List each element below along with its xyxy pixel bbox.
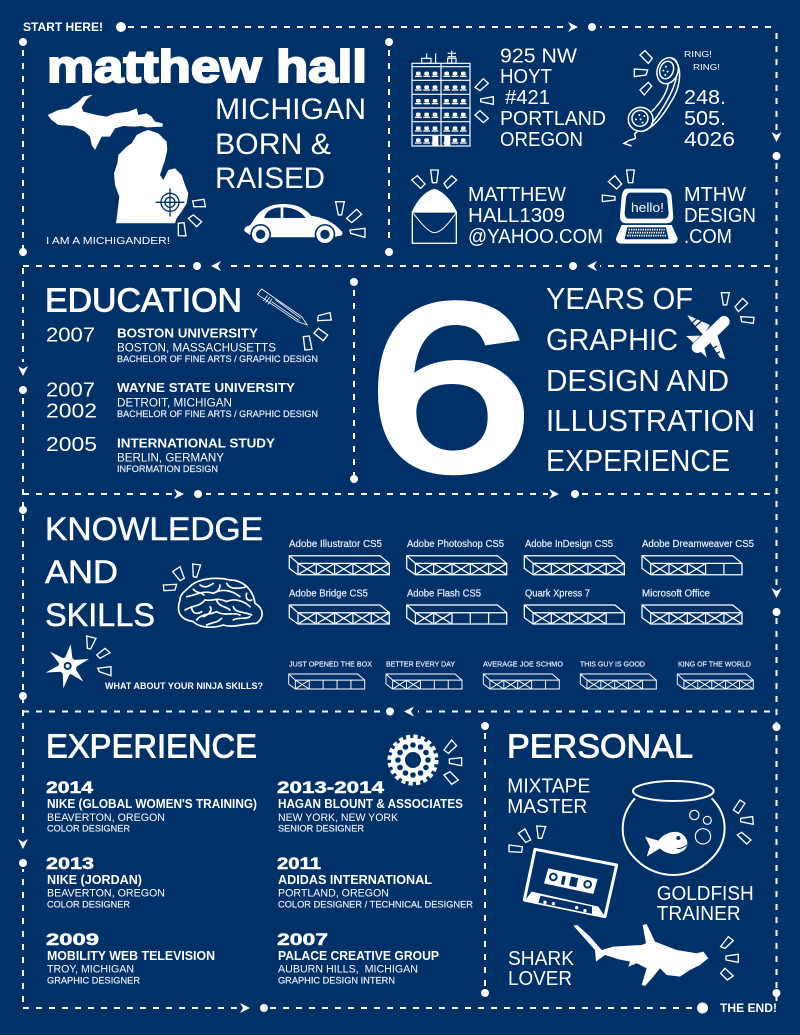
chart: software skill bars: Quark Xpress 7 xyxy=(525,589,590,600)
job: palace: AUBURN HILLS, MICHIGAN xyxy=(278,964,418,976)
job: mobility: 2009 xyxy=(46,930,99,949)
caption: ninja skills: WHAT ABOUT YOUR NINJA SKILLS? xyxy=(105,681,263,692)
text: michigan born and raised xyxy=(215,93,366,195)
text: phone number: 4026 xyxy=(684,129,735,151)
job: nike global: COLOR DESIGNER xyxy=(47,824,130,835)
icon: gear xyxy=(390,736,462,784)
text: years of graphic design and illustration experience: YEARS OF xyxy=(546,281,693,316)
chart: software skill bars: Adobe Flash CS5 xyxy=(407,589,481,600)
heading: experience: EXPERIENCE xyxy=(46,727,257,764)
chart: software skill bars: Microsoft Office xyxy=(642,589,710,600)
icon: computer xyxy=(602,170,678,244)
panel: years of experience xyxy=(368,256,755,520)
text: shark lover xyxy=(508,948,575,990)
job: nike global: BEAVERTON, OREGON xyxy=(47,812,165,824)
text: years of graphic design and illustration experience: DESIGN AND xyxy=(546,363,729,398)
chart: software skill bars: Adobe Bridge CS5 xyxy=(289,589,368,600)
job: nike global: 2014 xyxy=(46,778,94,797)
title: name: matthew hall xyxy=(47,41,367,92)
start label: START HERE! xyxy=(23,20,103,34)
job: nike jordan: 2013 xyxy=(46,854,94,873)
icon: hammerhead shark xyxy=(573,924,738,986)
job: adidas: COLOR DESIGNER / TECHNICAL DESIGNER xyxy=(278,899,473,910)
text: website xyxy=(684,184,756,248)
heading: knowledge and skills: SKILLS xyxy=(45,597,155,633)
caption: I AM A MICHIGANDER! xyxy=(46,235,170,247)
education entry: wayne state: 2002 xyxy=(46,400,97,422)
text: years of graphic design and illustration experience: GRAPHIC xyxy=(546,322,678,357)
chart: skill level legend: AVERAGE JOE SCHMO xyxy=(483,660,563,669)
chart: software skill bars xyxy=(289,539,754,624)
panel: knowledge and skills xyxy=(45,511,754,692)
text: years of graphic design and illustration experience: ILLUSTRATION xyxy=(546,403,755,438)
icon: computer: hello! xyxy=(631,200,664,215)
education entry: wayne state: WAYNE STATE UNIVERSITY xyxy=(117,380,295,395)
job: adidas: PORTLAND, OREGON xyxy=(278,888,389,900)
panel: personal xyxy=(507,727,754,990)
chart: software skill bars: Adobe Illustrator CS5 xyxy=(289,539,382,550)
text: shark lover: LOVER xyxy=(508,968,572,990)
icon: pencil xyxy=(257,289,331,350)
job: mobility: MOBILITY WEB TELEVISION xyxy=(47,949,215,963)
big number: 6 xyxy=(368,256,532,520)
icon: ninja star xyxy=(46,636,111,688)
education entry: international xyxy=(46,434,275,475)
text: website: MTHW xyxy=(684,184,746,206)
education entry: boston: BOSTON, MASSACHUSETTS xyxy=(117,341,276,355)
text: michigan born and raised: MICHIGAN xyxy=(215,93,366,126)
end label: THE END! xyxy=(720,1001,777,1015)
text: address: OREGON xyxy=(500,129,583,151)
chart: skill level legend: THIS GUY IS GOOD xyxy=(580,660,646,669)
panel: experience xyxy=(46,727,473,986)
chart: skill level legend xyxy=(289,660,753,689)
text: ring ring: RING! xyxy=(684,49,712,59)
text: shark lover: SHARK xyxy=(508,948,575,970)
job: adidas xyxy=(277,854,473,910)
text: email xyxy=(468,184,603,248)
job: hagan blount: SENIOR DESIGNER xyxy=(278,824,364,835)
heading: education: EDUCATION xyxy=(45,282,242,319)
job: nike global: NIKE (GLOBAL WOMEN'S TRAINING) xyxy=(47,797,257,811)
text: goldfish trainer: GOLDFISH xyxy=(657,883,754,905)
chart: software skill bars: Adobe Photoshop CS5 xyxy=(407,539,504,550)
education entry: boston: BACHELOR OF FINE ARTS / GRAPHIC DESIGN xyxy=(117,354,318,365)
heading: knowledge and skills xyxy=(45,511,263,633)
panel: education xyxy=(45,282,331,475)
job: hagan blount: HAGAN BLOUNT & ASSOCIATES xyxy=(278,797,463,811)
job: nike jordan: NIKE (JORDAN) xyxy=(47,873,142,887)
chart: skill level legend: KING OF THE WORLD xyxy=(678,660,752,669)
text: website: .COM xyxy=(684,226,732,248)
chart: software skill bars: Adobe InDesign CS5 xyxy=(525,539,613,550)
text: michigan born and raised: BORN & xyxy=(215,128,331,161)
text: address xyxy=(500,46,606,151)
text: address: PORTLAND xyxy=(500,108,606,130)
job: palace: 2007 xyxy=(277,930,328,949)
job: hagan blount xyxy=(277,778,463,835)
job: nike global xyxy=(46,778,257,835)
text: address: HOYT xyxy=(500,66,552,88)
text: michigan born and raised: RAISED xyxy=(215,162,325,195)
education entry: wayne state xyxy=(46,380,318,422)
job: mobility: TROY, MICHIGAN xyxy=(47,964,134,976)
icon: michigan map xyxy=(48,95,205,236)
heading: knowledge and skills: KNOWLEDGE xyxy=(45,511,263,547)
icon: cassette xyxy=(509,826,617,917)
text: years of graphic design and illustration experience: EXPERIENCE xyxy=(546,443,730,478)
text: email: MATTHEW xyxy=(468,184,566,206)
education entry: boston xyxy=(46,325,318,365)
text: phone number: 248. xyxy=(684,87,726,109)
text: email: @YAHOO.COM xyxy=(468,226,603,248)
chart: software skill bars: Adobe Dreamweaver CS5 xyxy=(642,539,754,550)
text: mixtape master xyxy=(507,776,590,818)
icon: car xyxy=(244,202,365,245)
education entry: boston: BOSTON UNIVERSITY xyxy=(117,325,258,340)
job: mobility: GRAPHIC DESIGNER xyxy=(47,975,140,986)
icon: brain xyxy=(163,564,262,627)
text: ring ring: RING! xyxy=(693,62,720,72)
text: goldfish trainer xyxy=(657,883,754,925)
job: hagan blount: 2013-2014 xyxy=(277,778,385,797)
text: address: 925 NW xyxy=(500,46,577,68)
job: adidas: ADIDAS INTERNATIONAL xyxy=(278,873,432,887)
text: goldfish trainer: TRAINER xyxy=(657,903,741,925)
job: adidas: 2011 xyxy=(277,854,321,873)
heading: personal: PERSONAL xyxy=(507,727,693,764)
text: years of graphic design and illustration experience xyxy=(546,281,755,478)
education entry: wayne state: DETROIT, MICHIGAN xyxy=(117,396,232,410)
text: address: #421 xyxy=(505,87,550,109)
education entry: international: INFORMATION DESIGN xyxy=(117,464,218,475)
panel: identity xyxy=(46,41,367,247)
job: palace: GRAPHIC DESIGN INTERN xyxy=(278,975,395,986)
job: palace: PALACE CREATIVE GROUP xyxy=(278,949,439,963)
chart: skill level legend: BETTER EVERY DAY xyxy=(386,660,455,669)
panel: contact xyxy=(412,46,756,248)
text: phone number xyxy=(684,87,735,151)
education entry: international: INTERNATIONAL STUDY xyxy=(117,436,275,451)
chart: skill level legend: JUST OPENED THE BOX xyxy=(289,660,372,669)
text: website: DESIGN xyxy=(684,205,756,227)
icon: fishbowl xyxy=(623,781,753,875)
text: mixtape master: MIXTAPE xyxy=(507,776,590,798)
icon: airplane xyxy=(686,293,754,359)
education entry: wayne state: BACHELOR OF FINE ARTS / GRAPHIC DESIGN xyxy=(117,409,318,420)
icon: envelope xyxy=(412,170,457,243)
text: mixtape master: MASTER xyxy=(507,796,587,818)
job: nike jordan: COLOR DESIGNER xyxy=(47,899,130,910)
job: hagan blount: NEW YORK, NEW YORK xyxy=(278,812,399,824)
icon: telephone xyxy=(624,51,682,146)
job: mobility xyxy=(46,930,215,986)
education entry: boston: 2007 xyxy=(46,325,95,347)
job: nike jordan xyxy=(46,854,165,910)
education entry: wayne state: 2007 xyxy=(46,380,95,402)
text: phone number: 505. xyxy=(684,108,726,130)
job: nike jordan: BEAVERTON, OREGON xyxy=(47,888,165,900)
text: email: HALL1309 xyxy=(468,205,565,227)
job: palace xyxy=(277,930,439,986)
education entry: international: BERLIN, GERMANY xyxy=(117,450,224,464)
education entry: international: 2005 xyxy=(46,434,97,456)
heading: knowledge and skills: AND xyxy=(45,554,118,590)
text: ring ring xyxy=(684,49,720,72)
icon: apartment building xyxy=(412,51,493,146)
